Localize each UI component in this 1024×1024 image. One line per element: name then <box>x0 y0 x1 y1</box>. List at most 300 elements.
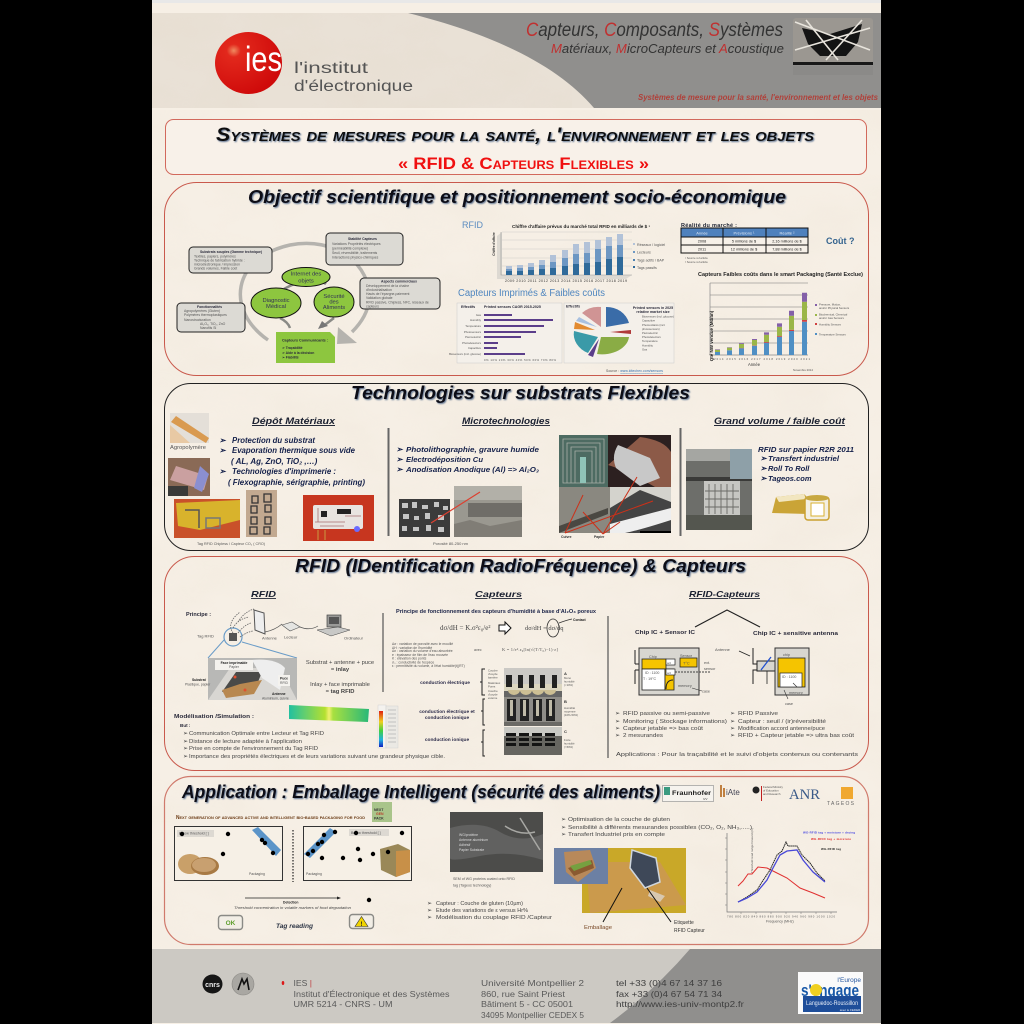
image: pore C: Forte <box>564 738 571 742</box>
diagram: sensor IC: T : 19°C <box>643 677 657 681</box>
bullets: but: ➢ <box>183 746 188 752</box>
column heading: Microtechnologies <box>462 416 550 426</box>
box: capteurs communicants <box>276 332 335 363</box>
box: aspects commerciaux: d'industrialisation <box>366 288 392 292</box>
image: pore B: B <box>564 699 567 704</box>
bullets: gluten: ➢ <box>561 825 566 831</box>
bullets right: ➢ <box>730 711 735 717</box>
footer contact <box>616 978 744 1009</box>
node: diagnostic médical: Diagnostic <box>262 298 290 304</box>
caption: cuivre: Cuivre <box>561 535 572 539</box>
table: marché: Prévisions ¹ <box>734 230 755 236</box>
image: cross-section SEM <box>454 486 522 537</box>
diagram: tag layers: Plastique, papier <box>185 682 211 686</box>
poster background <box>152 0 881 1024</box>
bullets: capteur: Capteur : Couche de gluten (10µm) <box>436 901 523 907</box>
applications: Applications : Pour la traçabilité et le suivi d'objets contenus ou contenants <box>616 752 858 758</box>
chart: read range: Threshold read range forward (m) <box>750 828 754 873</box>
image: pore B: (10%-50%) <box>564 713 578 717</box>
diagram: packaging fresh: Below threshold [ ] <box>179 832 209 836</box>
text: inlay: Inlay + face imprimable <box>310 682 370 688</box>
footer address: IES: UMR 5214 - CNRS - UM <box>294 999 392 1009</box>
bullets: Electrodéposition Cu <box>406 455 483 464</box>
logo: ies red disc <box>215 32 282 94</box>
box: aspects commerciaux: capteurs <box>366 304 379 308</box>
table: marché: Année <box>696 230 709 236</box>
logo: fraunhofer: Fraunhofer <box>672 790 712 797</box>
footer address: université <box>481 978 584 1020</box>
logo: next gen pack: GEN <box>376 812 384 816</box>
bullets: RFID sur papier R2R 2011 <box>758 447 854 454</box>
logo wordmark <box>294 60 413 95</box>
label: sensitive antenna: Chip IC + sensitive antenna <box>753 631 839 637</box>
heading: Application : Emballage Intelligent (sécurité des aliments) <box>181 782 660 802</box>
logo: europe <box>798 972 863 1014</box>
bullets left: ➢ <box>615 726 620 732</box>
logo: université <box>232 973 254 995</box>
logo: tageos <box>827 787 855 807</box>
bullets left: ➢ <box>615 733 620 739</box>
label: principe: Principe : <box>186 612 211 618</box>
bullets: but: Importance des propriétés électriques et de leurs variations suivant une grandeur physique cible. <box>189 754 445 760</box>
diagram: sensitive antenna: ID : 1100 <box>782 675 796 679</box>
diagram: sensor IC: case <box>702 690 710 694</box>
diagram: RFID system: Antenne <box>262 636 278 640</box>
image: tag rolls <box>772 494 829 520</box>
diagram: RFID system: Lecteur <box>284 634 298 640</box>
chart: read range: Frequency (MHz) <box>766 920 794 924</box>
table: marché: Réalité ² <box>780 230 795 236</box>
bullets left: Capteur jetable => bas coût <box>623 726 703 732</box>
chart: printed sensors bars: Capacitive <box>468 346 481 350</box>
header team title: Matériaux, MicroCapteurs et Acoustique <box>551 41 784 56</box>
principle line: Principe de fonctionnement des capteurs d'humidité à base d'Al₂O₃ poreux <box>396 609 597 615</box>
conduction rows: conduction électrique <box>420 680 470 686</box>
chart: smart packaging: Temperature Sensors <box>819 332 846 336</box>
column: grand volume <box>680 416 854 536</box>
bullets left: ➢ <box>615 711 620 717</box>
conduction rows: Pores <box>488 684 496 688</box>
diagram: internet des objets <box>177 233 440 363</box>
table notes <box>685 256 708 264</box>
node: sécurité des aliments: Sécurité <box>323 294 345 300</box>
bullets: Anodisation Anodique (Al) => Al₂O₃ <box>405 465 539 474</box>
bullets right: ➢ <box>730 726 735 732</box>
diagram: tag layers: Antenne <box>272 692 286 696</box>
logo wordmark: d'électronique <box>294 78 413 95</box>
box: fonctionnalités: Al₂O₃, TiO₂, ZnO <box>200 322 226 326</box>
diagram: sensitive antenna: case <box>785 702 793 706</box>
callout: coût: Coût ? <box>826 236 854 246</box>
footer band <box>152 949 881 1023</box>
box: fonctionnalités: Fonctionnalités <box>197 305 222 309</box>
box: stabilité: Stabilité Capteurs <box>348 237 377 241</box>
chart: smart packaging: Novembre 2014 <box>793 368 813 372</box>
table: marché: 2008 <box>698 240 706 244</box>
formula: dσ/dH = dσ/dq <box>525 625 564 632</box>
chart: chiffre d'affaires RFID: Tags actifs / BAP <box>637 258 665 262</box>
column heading: RFID-Capteurs <box>689 589 760 599</box>
diagram: packaging fresh: Packaging <box>249 872 265 876</box>
panel: application emballage intelligent <box>164 776 868 944</box>
box: fonctionnalités <box>177 303 245 332</box>
diagram: RFID system: Tag RFID <box>197 634 214 638</box>
bullets: capteur <box>427 901 552 921</box>
chart: read range: WG-RFID tag + moisture <box>811 837 851 841</box>
column: capteurs <box>383 589 597 756</box>
box: fonctionnalités: Polymères thermoplastiques <box>184 313 227 317</box>
diagram: sensor IC: sensor <box>704 667 716 671</box>
bullets: gluten: Transfert Industriel pris en compte <box>568 832 665 838</box>
image: pore C: humidité <box>564 742 575 746</box>
chart: read range: WG-RFID tag <box>821 847 841 851</box>
caption: Porosité 80-250 nm <box>433 542 468 546</box>
diagram: tag layers: Substrat <box>192 678 207 682</box>
bullets: but: Distance de lecture adaptée à l'application <box>189 739 302 745</box>
footer address: IES: Institut d'Électronique et des Systèmes <box>294 989 450 999</box>
chart: smart packaging: Qté NW vendue (Md/an) <box>709 310 714 361</box>
button: warning <box>350 914 374 928</box>
diagram: tag layers: RFID <box>280 681 289 685</box>
chart: pie: Piezoelectric <box>642 331 658 335</box>
box: fonctionnalités: Agropolymères (Gluten) <box>184 309 220 313</box>
bullets: capteur: Etude des variations de ε versus Hr% <box>436 908 528 914</box>
bullets: Transfert industriel <box>768 454 840 463</box>
diagram: tag layers <box>185 658 297 700</box>
diagram: sensor IC: memory <box>678 684 692 688</box>
arrow: detection: Threshold concentration in volatile markers of food degradation <box>234 906 351 910</box>
logo: next gen pack: NEXT <box>374 808 384 812</box>
text: inlay: = tag RFID <box>326 689 354 695</box>
panel: objectif scientifique <box>164 182 868 376</box>
bullets: ➢ <box>219 467 227 476</box>
button: OK <box>218 916 242 930</box>
diagram: tag layers: Papier <box>229 665 240 669</box>
column: dépôt matériaux <box>168 413 374 546</box>
node: internet des objets <box>282 268 330 286</box>
node: internet des objets: Internet des <box>291 272 321 278</box>
text: inlay <box>306 660 374 695</box>
box: substrats: microélectronique / impression <box>194 262 240 266</box>
logo: europe: avec le FEDER <box>840 1008 861 1012</box>
bullets: Technologies d'imprimerie : <box>232 467 336 476</box>
bullets: ( AL, Ag, ZnO, TiO₂ ,…) <box>231 457 318 466</box>
chart: smart packaging: and/or Physical Sensors <box>819 306 850 310</box>
image: pore C <box>504 727 575 755</box>
panel: RFID et capteurs <box>164 556 868 770</box>
diagram: RFID system: Ordinateur <box>344 636 364 640</box>
box: capteurs communicants: ➢ Fiabilité <box>282 356 299 360</box>
bullets: ➢ <box>219 436 227 445</box>
bullets: but <box>180 723 445 760</box>
chart: read range: WG-RFID tag + moisture + drying <box>803 830 855 834</box>
bullets: ➢ <box>760 474 768 483</box>
image: pore A: (<10%) <box>564 683 573 687</box>
image: pore B: Humidité <box>564 706 575 710</box>
box: aspects commerciaux: Validation globale <box>366 296 393 300</box>
caption <box>453 877 515 888</box>
definitions: ε : permittivité du volume, à l'état humidité(t)(RT) <box>392 664 465 668</box>
bullets left: Monitoring ( Stockage informations) <box>623 719 727 725</box>
image: pore A: humidité <box>564 680 575 684</box>
box: substrats <box>189 247 272 273</box>
box: fonctionnalités: Nanofils Si <box>200 326 216 330</box>
bullets: ➢ <box>396 465 404 474</box>
column: microtechnologies <box>388 416 671 546</box>
node: sécurité des aliments <box>314 287 354 317</box>
diagram: sensor IC: T°C <box>683 662 690 666</box>
image: agropolymère <box>170 413 209 443</box>
diagram: sensor IC <box>635 648 716 695</box>
label: emballage: Emballage <box>584 925 612 931</box>
box: fonctionnalités: Nanostructuration <box>184 318 211 322</box>
image: pore C: C <box>564 729 567 734</box>
arrow: detection <box>234 896 371 910</box>
bullets left: 2 mesurandes <box>623 733 663 739</box>
chart: smart packaging: Pressure, Motion, <box>819 302 841 306</box>
arrow: detection: Detection <box>283 900 298 904</box>
logo: fraunhofer: IVV <box>703 797 708 801</box>
panel: technologies sur substrats flexibles <box>164 383 868 550</box>
diagram: sensor IC: a/d <box>667 661 671 665</box>
logo: next gen pack <box>372 802 392 822</box>
box: capteurs communicants: Capteurs Communicants : <box>282 338 328 342</box>
chart: chiffre d'affaires RFID: Tags passifs <box>637 266 657 270</box>
logo: tageos: TAGEOS <box>827 801 855 807</box>
footer address: université: 34095 Montpellier CEDEX 5 <box>481 1010 584 1020</box>
heading: réalité du marché: Réalité du marché : <box>681 223 737 229</box>
chart: chiffre d'affaires RFID: Réseaux / logiciel <box>637 243 665 247</box>
bullets: capteur: ➢ <box>427 901 432 907</box>
logo: ies red disc: ies <box>245 40 282 79</box>
chart: printed sensors bars: Effectifs <box>461 305 475 309</box>
image: SEM gluten: Papier Substrate <box>459 848 484 852</box>
chart: printed sensors bars: Photosensors <box>464 330 482 334</box>
table: marché: 12 millions de $ <box>731 248 758 252</box>
definitions: Δσ : variation de porosité avec le mouillé <box>392 642 453 646</box>
bullets right: RFID Passive <box>738 711 778 717</box>
logo: europe: l'Europe <box>837 977 861 984</box>
image: pore C: (>50%) <box>564 745 573 749</box>
box: aspects commerciaux: Hauts de l'épargne-paiement <box>366 292 409 296</box>
header team title: Capteurs, Composants, Systèmes <box>526 20 783 41</box>
bullets right: Modification accord antenne/puce <box>738 726 825 732</box>
header team title <box>526 20 784 56</box>
conduction rows: externe <box>488 696 498 700</box>
box: stabilité <box>326 233 403 265</box>
bullets: ( Flexographie, sérigraphie, printing) <box>228 478 365 487</box>
box: capteurs communicants: ➢ Traçabilité <box>282 346 303 350</box>
footer address: université: Université Montpellier 2 <box>481 978 584 988</box>
diagram: packaging fresh <box>174 826 282 880</box>
image: pore A: A <box>564 671 567 676</box>
formula <box>440 618 586 637</box>
footer contact: fax +33 (0)4 67 54 71 34 <box>616 989 722 999</box>
chart: pie: relative market size <box>636 310 670 314</box>
logo: ministry: of Education <box>763 788 779 792</box>
logo: iate: iAte <box>726 788 740 797</box>
chart: pie: Gas <box>642 348 648 352</box>
chart: printed sensors bars: Piezoelectric <box>465 335 482 339</box>
image: flexible substrate <box>168 458 210 496</box>
node: internet des objets: objets <box>298 278 314 284</box>
footer contact: tel +33 (0)4 67 14 37 16 <box>616 978 722 988</box>
chart: smart packaging: 2014 2015 2016 2017 2018 2019 2020 2021 <box>714 357 810 361</box>
button: OK: OK <box>226 920 236 927</box>
image: roll to roll <box>686 449 752 530</box>
logo: cnrs: cnrs <box>205 982 220 989</box>
label: étiquette: RFID Capteur <box>674 928 705 934</box>
formula: dσ/dH = K.σ²ε₀/e² <box>440 624 490 632</box>
chart: chiffre d'affaires RFID: Lecteurs <box>637 250 651 254</box>
logo: iate <box>720 785 740 797</box>
table: marché: 2,16 millions de $ <box>772 240 803 244</box>
chart: printed sensors bars: Humidity <box>470 318 482 322</box>
bullets: gluten: ➢ <box>561 832 566 838</box>
diagram: sensitive antenna: memory <box>789 691 803 695</box>
diagram: RFID system <box>197 609 364 658</box>
diagram: sensor IC: a/d <box>667 671 671 675</box>
chart: printed sensors bars: 0% 10% 20% 30% 40% 50% 60% 70% 80% <box>484 358 556 362</box>
image: circuit <box>303 495 374 541</box>
image: flexible copper samples <box>559 435 671 534</box>
node: sécurité des aliments: Aliments <box>323 305 345 311</box>
red dot <box>282 981 284 985</box>
column heading: Dépôt Matériaux <box>252 416 336 427</box>
chart: printed sensors bars: Photodetectors <box>462 341 482 345</box>
bullets right: Capteur : seuil / (ir)réversibilité <box>738 719 826 725</box>
image: SEM gluten <box>450 812 543 872</box>
bullets: but: ➢ <box>183 754 188 760</box>
chart: pie: Effectifs <box>566 304 580 308</box>
logo: europe: s'engage <box>801 981 859 1000</box>
table notes: ¹ Source ref.article <box>685 256 708 260</box>
bullets <box>396 445 539 474</box>
diagram: tag layers: Aluminium, cuivre <box>262 696 289 700</box>
footer address: IES <box>294 978 450 1009</box>
bullets: capteur: ➢ <box>427 915 432 921</box>
label: étiquette: Etiquette <box>674 920 694 926</box>
chart: pie: Photovoltaics (incl. <box>642 323 666 327</box>
chart: smart packaging: Biochemical, Chemical <box>819 312 848 316</box>
box: substrats: Grands volumes, Faible coût <box>194 266 237 270</box>
bullets: Evaporation thermique sous vide <box>232 446 356 455</box>
column: RFID <box>174 589 445 760</box>
diagram: tag layers: Puce <box>280 676 288 680</box>
diagram: packaging spoiled: Below threshold [ ] <box>351 831 381 835</box>
diagram: sensitive antenna: chip <box>783 653 790 657</box>
image: pore B: moyenne <box>564 710 576 714</box>
chart: printed sensors bars: Gas <box>476 313 482 317</box>
bullets right: ➢ <box>730 733 735 739</box>
chart: chiffre d'affaires RFID <box>492 224 665 283</box>
definitions: Δn : variation du volume d'eau absorbée <box>392 649 453 653</box>
conduction rows: Matériaux <box>488 681 501 685</box>
button: warning: ! <box>360 922 362 928</box>
bullets: Protection du substrat <box>232 436 315 445</box>
bullets left <box>615 711 727 739</box>
diagram: sensitive antenna: Antenne <box>715 647 731 652</box>
box: stabilité: Interactions physico-chimiques <box>332 256 379 260</box>
header band <box>152 13 881 108</box>
bullets right <box>730 711 854 739</box>
heading: RFID (IDentification RadioFréquence) & Capteurs <box>295 556 746 576</box>
heading: Technologies sur substrats Flexibles <box>351 383 690 403</box>
box: stabilité: (perméabilité complexe) <box>332 246 368 250</box>
footer address: université: Bâtiment 5 - CC 05001 <box>481 999 573 1009</box>
bullets: ➢ <box>219 446 227 455</box>
definitions: K : élévation des ponts <box>392 656 427 660</box>
caption: tag (Tageos technology) <box>453 884 491 888</box>
conduction rows: conduction électrique et <box>419 709 475 715</box>
conduction rows: d'oxyde <box>488 672 498 676</box>
bullets: Photolithographie, gravure humide <box>406 445 539 454</box>
chart: chiffre d'affaires RFID: Chiffre d'affaire <box>492 232 496 256</box>
diagram: tag layers: Face imprimable <box>221 661 247 665</box>
bullets: but: Prise en compte de l'environnement du Tag RFID <box>189 746 318 752</box>
image: printed antennas <box>246 490 277 537</box>
box: aspects commerciaux: Aspects commerciaux <box>381 280 417 284</box>
bullets: gluten: Optimisation de la couche de gluten <box>568 817 670 823</box>
heading: Objectif scientifique et positionnement socio-économique <box>248 187 786 207</box>
bullets: capteur: Modélisation du couplage RFID /Capteur <box>436 915 552 921</box>
header image: sensor logo <box>793 18 873 75</box>
diagram: sensor IC: Chip <box>649 655 657 659</box>
box: aspects commerciaux: Développement de la chaîne <box>366 284 409 288</box>
logo: next gen pack: PACK <box>374 816 384 820</box>
chart: printed sensors bars: Printed sensors CAGR 2015-2025 <box>484 305 541 309</box>
bullets: but: ➢ <box>183 739 188 745</box>
chart: chiffre d'affaires RFID: 2009 2010 2011 2012 2013 2014 2015 2016 2017 2018 2019 <box>505 279 627 283</box>
diagram: sensor IC: Sensor <box>680 654 693 658</box>
bullets: Tageos.com <box>768 474 812 483</box>
image: pore A <box>504 668 575 697</box>
table: marché <box>681 228 808 253</box>
bullets right: ➢ <box>730 719 735 725</box>
logo: europe: Languedoc-Roussillon <box>806 1001 858 1007</box>
diagram: sensor IC: ID : 1100 <box>645 671 659 675</box>
formula: Contact <box>573 618 586 622</box>
conduction rows: Couche <box>488 668 498 672</box>
chart: pie: Temperature <box>642 339 658 343</box>
chart: printed sensors bars: Biosensors (incl. glucose) <box>449 352 481 356</box>
box: aspects commerciaux: RFID passive, Chipless, NFC, réseaux de <box>366 300 429 304</box>
image: simulation <box>289 705 398 748</box>
table: marché: 2011 <box>698 248 706 252</box>
label: étiquette <box>674 920 705 934</box>
definitions: σ₀ : conductivité de l'espèce <box>392 660 434 664</box>
source: Source : www.idtechex.com/sensors <box>606 369 663 373</box>
table: marché: 5 millions de $ <box>732 240 757 244</box>
chart: smart packaging: Humidity Sensors <box>819 322 842 326</box>
chart: pie: Photodetectors <box>642 335 661 339</box>
footer contact: http://www.ies-univ-montp2.fr <box>616 999 744 1009</box>
bullets: gluten <box>561 817 752 838</box>
chart: pie: Humidity <box>642 344 653 348</box>
bullets: but: But : <box>180 723 191 728</box>
table notes: ² Source ref.article <box>685 260 708 264</box>
chart: printed sensors bars <box>449 303 562 363</box>
definitions <box>392 642 558 668</box>
label: tag reading: Tag reading <box>276 923 313 930</box>
bullets: ➢ <box>760 464 768 473</box>
logo: ministry: and Research <box>763 792 781 796</box>
image: porous alumina SEM <box>399 499 450 537</box>
caption: SEM of WG proteins coated onto RFID <box>453 877 515 881</box>
diagram: sensitive antenna <box>715 647 809 706</box>
label: modélisation: Modélisation /Simulation : <box>174 714 254 720</box>
image: SEM gluten: Adhésif <box>459 843 470 847</box>
